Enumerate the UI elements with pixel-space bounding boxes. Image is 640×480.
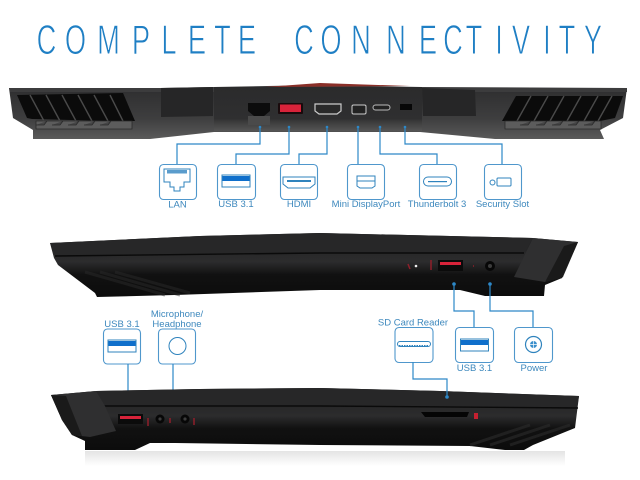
label: Thunderbolt 3: Thunderbolt 3	[408, 199, 466, 210]
label: Microphone/Headphone: Microphone/	[151, 309, 203, 320]
hinge block	[51, 391, 116, 437]
security slot port	[400, 104, 412, 110]
sd indicator	[474, 413, 478, 419]
icon: USB 3.1	[104, 329, 140, 364]
left vent	[17, 93, 135, 129]
icon: SD Card Reader	[395, 328, 433, 362]
label: LAN: LAN	[168, 200, 187, 210]
usb port red	[438, 260, 463, 271]
icon: USB 3.1	[218, 164, 256, 200]
icon: LAN	[160, 164, 196, 200]
connector lines rear	[177, 126, 502, 164]
label: Security Slot: Security Slot	[476, 199, 530, 210]
laptop side view, top	[50, 233, 578, 297]
label: SD Card Reader: SD Card Reader	[378, 318, 448, 328]
icon: HDMI	[280, 164, 318, 200]
red hinge accent	[265, 83, 410, 87]
laptop side view, bottom	[51, 388, 579, 450]
icon: Mini DisplayPort	[348, 164, 384, 200]
red marks	[148, 418, 194, 426]
label: USB 3.1: USB 3.1	[218, 199, 254, 210]
laptop rear view	[9, 83, 627, 139]
connector lines side top	[452, 282, 533, 327]
icon: Thunderbolt 3	[420, 164, 456, 200]
label: Microphone/Headphone: Headphone	[152, 319, 202, 330]
label: Power: Power	[521, 363, 547, 374]
status led	[415, 265, 417, 267]
right hinge cover	[422, 88, 476, 116]
lan port	[248, 103, 270, 116]
thunderbolt port	[373, 105, 390, 110]
icon: Security Slot	[484, 164, 522, 200]
red marks	[408, 260, 474, 270]
hinge block	[514, 238, 578, 282]
connector line SD	[413, 362, 449, 399]
power jack	[485, 261, 495, 271]
label: HDMI: HDMI	[287, 199, 311, 210]
mini displayport	[352, 105, 366, 114]
icon: USB 3.1	[456, 328, 494, 362]
hdmi port	[315, 104, 341, 114]
usb port red	[118, 414, 143, 424]
label: Microphone/Headphone	[151, 309, 203, 330]
right vent	[502, 96, 623, 129]
icon: Microphone/Headphone	[158, 329, 196, 364]
label: USB 3.1: USB 3.1	[457, 363, 492, 374]
port panel	[214, 87, 422, 131]
label: USB 3.1: USB 3.1	[104, 319, 140, 330]
audio jacks	[156, 414, 190, 424]
label: Mini DisplayPort: Mini DisplayPort	[332, 199, 401, 210]
left hinge cover	[161, 87, 213, 117]
connector lines side bottom	[126, 364, 175, 397]
title: COMPLETE CONNECTIVITY	[37, 16, 602, 63]
icon: Power	[514, 328, 552, 362]
usb port red	[278, 103, 303, 114]
sd card slot	[421, 412, 469, 417]
floor reflection	[85, 451, 565, 466]
